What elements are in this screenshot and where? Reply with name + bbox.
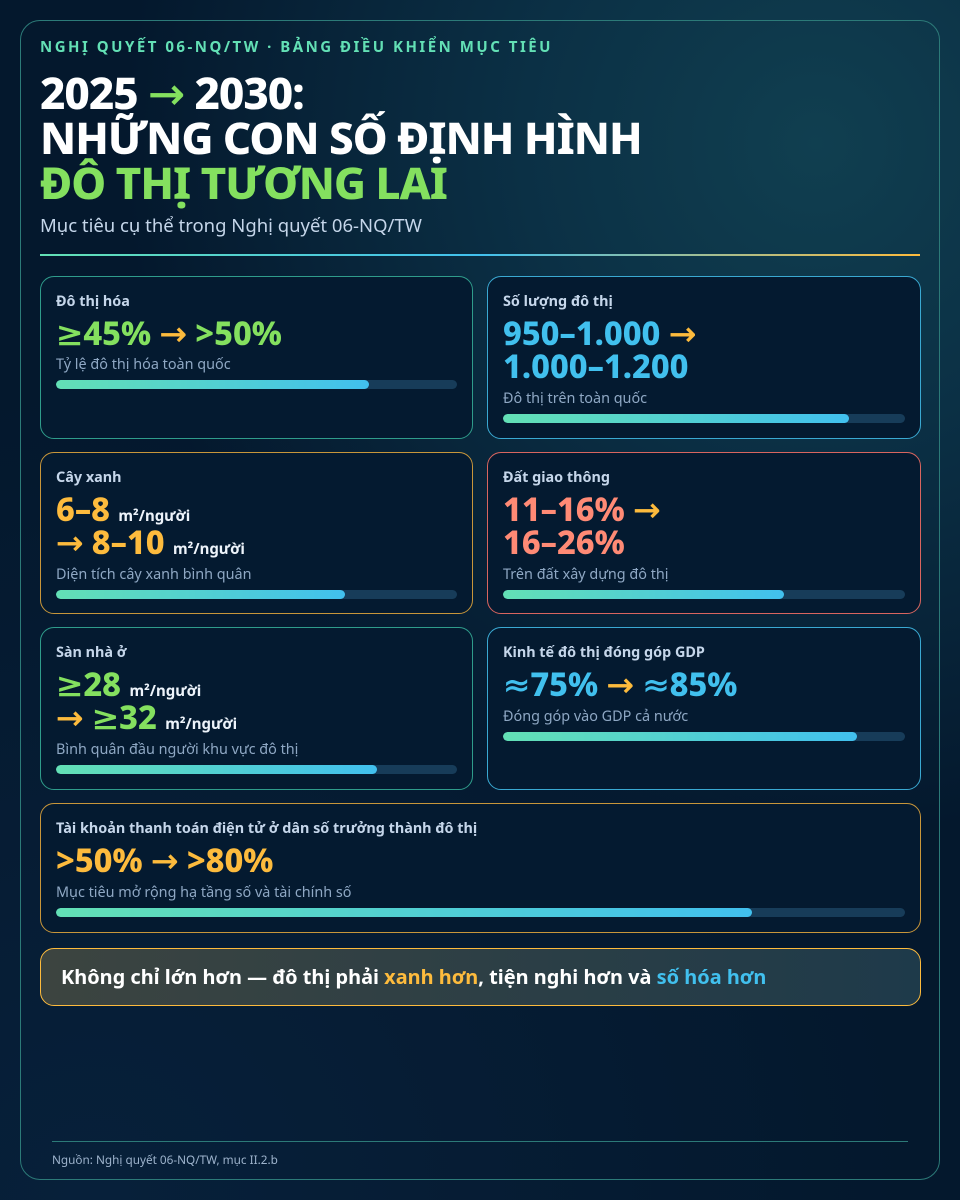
panel: electronic payment accounts: Tài khoản thanh toán điện tử ở dân số trưởng thành đô thị — [56, 819, 477, 838]
panel: urban economy GDP: Đóng góp vào GDP cả nước — [503, 707, 688, 726]
panel: urbanization rate: Tỷ lệ đô thị hóa toàn quốc — [56, 355, 231, 374]
panel: housing floor area: Sàn nhà ở — [56, 643, 127, 662]
panel: electronic payment accounts — [40, 803, 921, 933]
panel: green space: Diện tích cây xanh bình quân — [56, 565, 252, 584]
title — [40, 62, 642, 212]
panel: number of urban areas: Đô thị trên toàn quốc — [503, 389, 647, 408]
panel: transport land: Đất giao thông — [503, 468, 610, 487]
panel: number of urban areas: Số lượng đô thị — [503, 292, 613, 311]
panel: transport land: 16–26% — [503, 519, 625, 564]
panel: urbanization rate — [40, 276, 473, 439]
title: ĐÔ THỊ TƯƠNG LAI — [40, 152, 447, 212]
panel: electronic payment accounts: >50% → >80% — [56, 837, 273, 882]
callout banner: Không chỉ lớn hơn — đô thị phải xanh hơn, tiện nghi hơn và số hóa hơn — [61, 963, 766, 990]
source footer: Nguồn: Nghị quyết 06-NQ/TW, mục II.2.b — [52, 1152, 278, 1168]
panel: urban economy GDP — [487, 627, 921, 790]
panel: urbanization rate: Đô thị hóa — [56, 292, 130, 311]
panel: housing floor area — [40, 627, 473, 790]
callout banner — [40, 948, 921, 1006]
panel: number of urban areas — [487, 276, 921, 439]
panel: green space: 6–8 m²/người — [56, 486, 190, 531]
panel: transport land: 11–16% → — [503, 486, 660, 531]
panel: transport land — [487, 452, 921, 614]
title: 2025 → 2030: — [40, 62, 304, 122]
panel: urban economy GDP: Kinh tế đô thị đóng góp GDP — [503, 643, 705, 662]
panel: number of urban areas: 950–1.000 → — [503, 310, 696, 355]
title: NHỮNG CON SỐ ĐỊNH HÌNH — [40, 107, 642, 167]
panel: electronic payment accounts: Mục tiêu mở rộng hạ tầng số và tài chính số — [56, 883, 351, 902]
panel: housing floor area: ≥28 m²/người — [56, 661, 201, 706]
panel: transport land: Trên đất xây dựng đô thị — [503, 565, 669, 584]
panel: green space: Cây xanh — [56, 468, 121, 487]
panel: housing floor area: → ≥32 m²/người — [56, 694, 237, 739]
panel: green space — [40, 452, 473, 614]
subtitle: Mục tiêu cụ thể trong Nghị quyết 06-NQ/TW — [40, 213, 422, 238]
panel: urbanization rate: ≥45% → >50% — [56, 310, 282, 355]
panel: green space: → 8–10 m²/người — [56, 519, 245, 564]
panel: housing floor area: Bình quân đầu người khu vực đô thị — [56, 740, 298, 759]
panel: urban economy GDP: ≈75% → ≈85% — [503, 661, 737, 706]
eyebrow heading: NGHỊ QUYẾT 06-NQ/TW · BẢNG ĐIỀU KHIỂN MỤC TIÊU — [40, 37, 553, 57]
panel: number of urban areas: 1.000–1.200 — [503, 343, 689, 388]
